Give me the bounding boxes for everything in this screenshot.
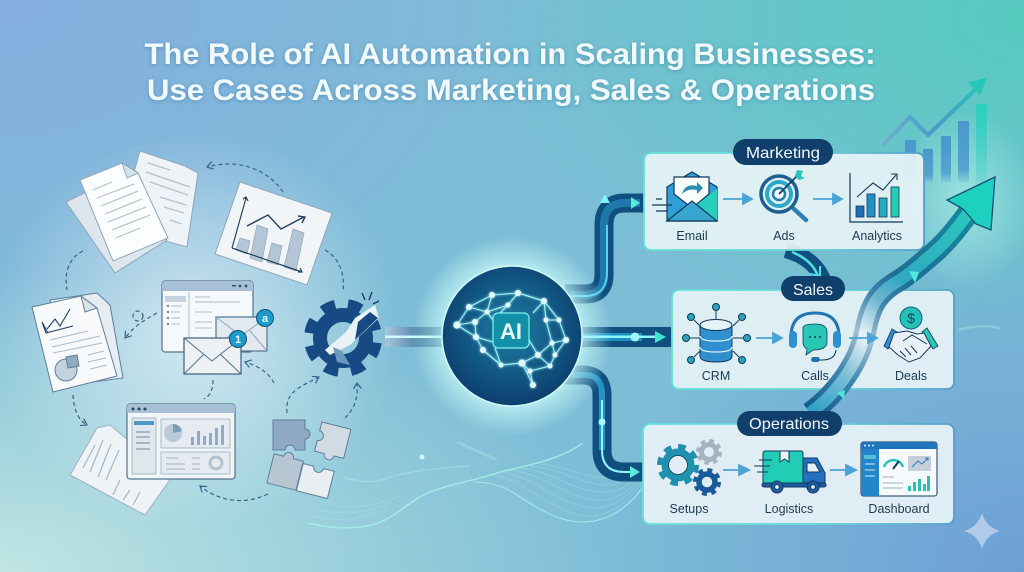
title: Use Cases Across Marketing, Sales & Operations [147,74,875,107]
icon: stack of documents [66,151,198,273]
pipe: AI to marketing [565,194,644,296]
panel: sales [672,290,954,389]
AI chip: AI [500,319,522,344]
arrow [813,194,842,204]
icon: deals handshake: $ [907,310,915,326]
icon: scattered page [70,425,172,515]
labels: CRM [702,369,730,383]
arrow [849,333,877,343]
pipe: marketing to sales [786,250,824,282]
icon: sparkle watermark [964,513,1000,549]
icon: CRM database [682,304,750,364]
icon: chart sheet [215,182,332,285]
labels: Deals [895,369,927,383]
icon: headset [789,313,841,362]
icon: delivery truck [754,451,826,493]
labels: Dashboard [868,502,930,516]
labels: Email [676,229,708,243]
icon: deals handshake [884,307,938,362]
arrow [723,194,752,204]
labels [670,502,930,516]
icon: ads target [761,170,806,220]
dashed cycle arrows [66,164,357,501]
icon: jigsaw puzzle [267,420,351,498]
arrow [756,333,782,343]
big growth arrow [810,177,995,413]
heading: sales: Sales [793,282,833,299]
pipe: gear to AI [385,327,443,347]
heading: marketing: Marketing [746,145,820,162]
title [144,38,876,107]
panel: operations [643,424,954,524]
icon: dashboard window [127,404,235,479]
title: The Role of AI Automation in Scaling Businesses: [144,38,876,71]
heading: sales [781,276,845,301]
icon: broken gear with tool [307,292,379,374]
AI brain hub [412,236,612,436]
heading: operations [737,411,842,436]
labels: Ads [773,229,795,243]
labels: Analytics [852,229,902,243]
icon: envelopes with badges [184,310,274,374]
labels: Setups [670,502,708,516]
heading: marketing [733,139,833,165]
pipe: AI to operations [565,375,644,478]
labels [676,229,902,243]
arrow [830,465,856,475]
icon: envelopes with badges: a [262,313,269,325]
flowing wave lines [307,326,1000,528]
arrow [723,465,749,475]
icon: report pages [32,293,123,392]
wave sparkle [420,454,424,460]
pipe: AI to sales [580,327,672,347]
AI chip [493,313,529,348]
labels: Calls [801,369,829,383]
icon: mail window [162,281,253,352]
icon: email [652,172,717,221]
icon: dashboard [861,442,937,496]
icon: analytics chart [850,173,903,222]
icon: setup gears [661,442,719,493]
sales labels and deals over arrow [702,307,938,383]
labels [702,369,927,383]
panel: marketing [644,153,924,250]
labels: Logistics [765,502,813,516]
growth chart behind panels [883,78,1024,290]
brain network [454,290,569,388]
icon: envelopes with badges: 1 [235,334,241,346]
heading: operations: Operations [749,416,829,433]
